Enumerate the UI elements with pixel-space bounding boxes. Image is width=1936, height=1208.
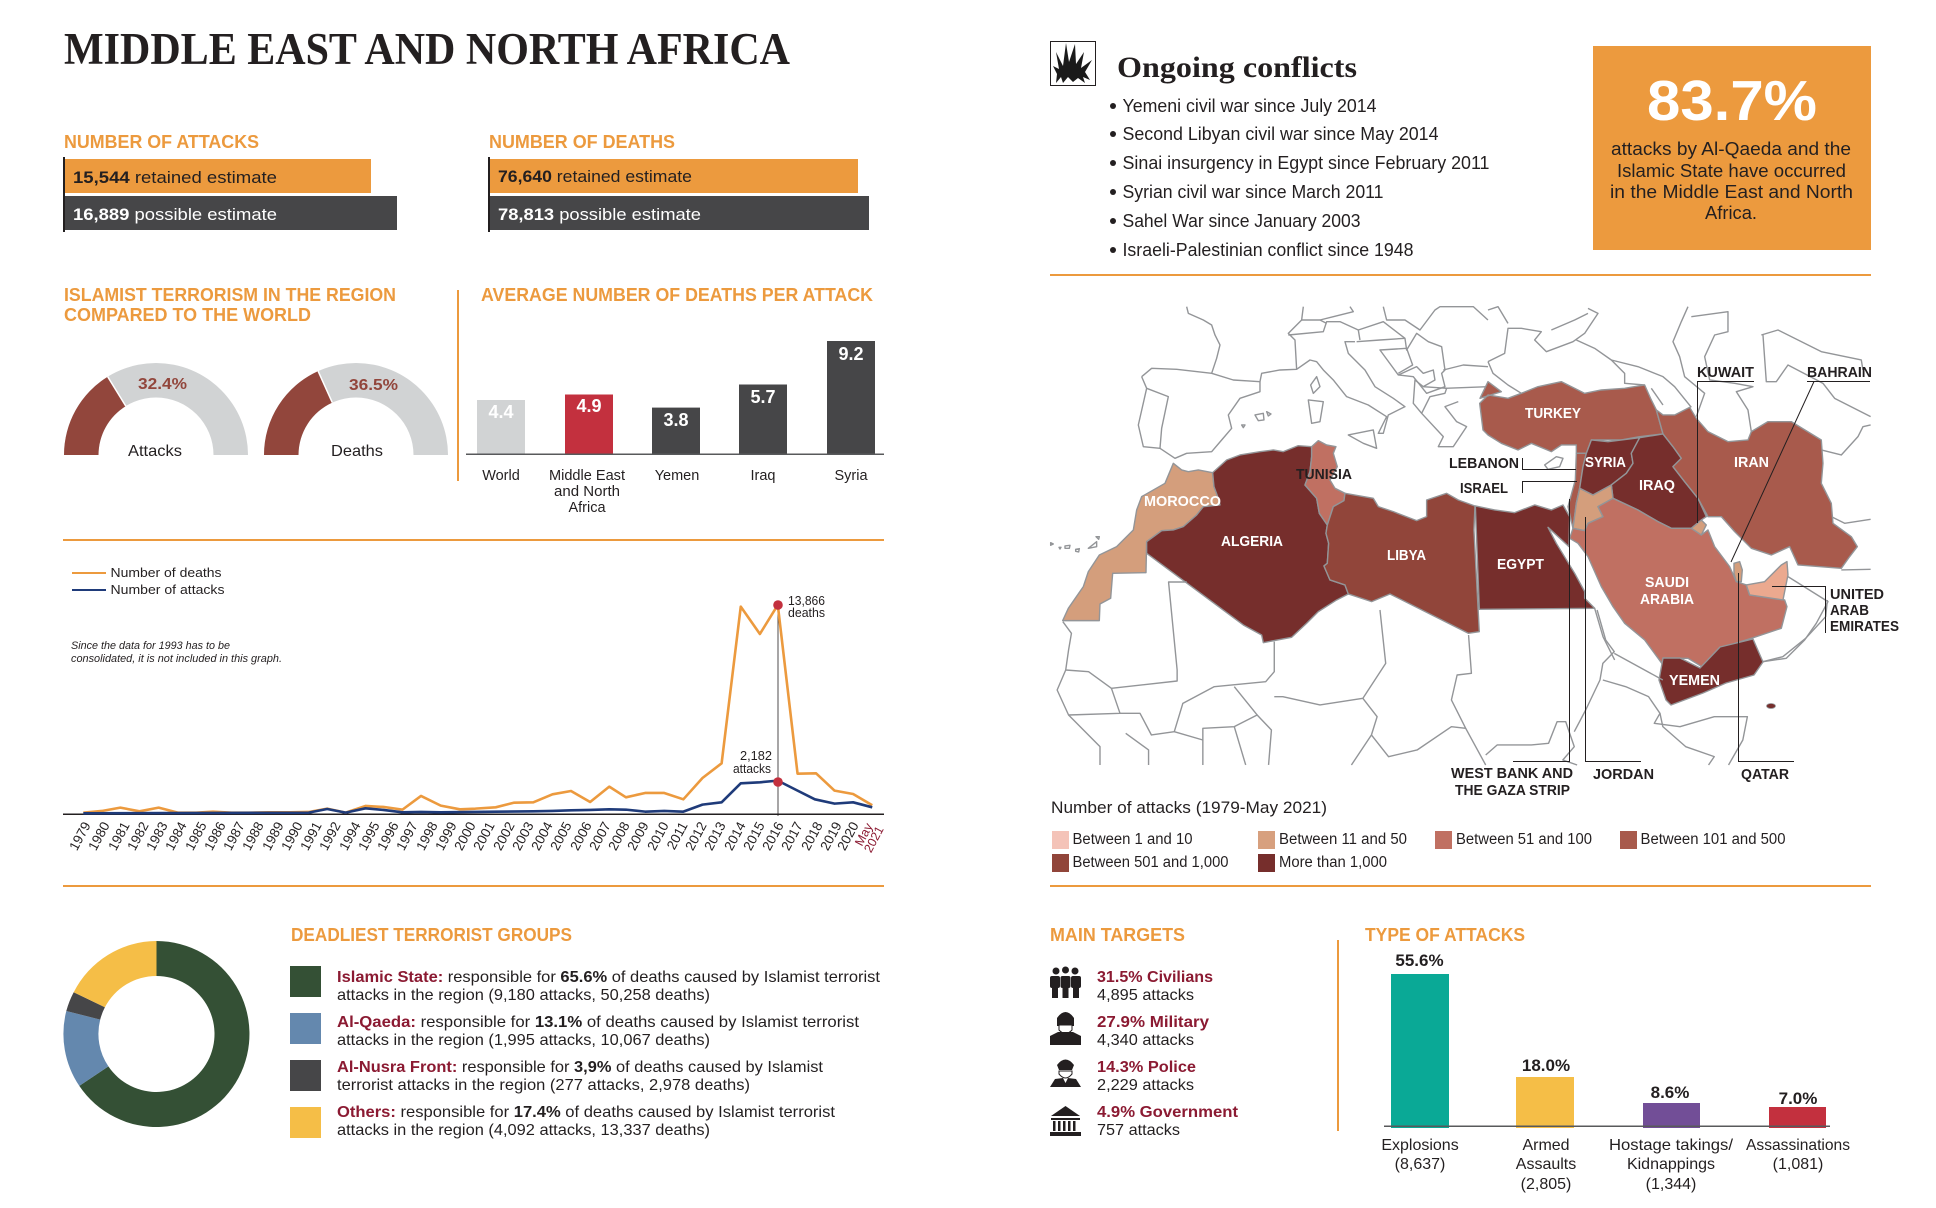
- country: Jordan: [1573, 485, 1613, 531]
- divider: [1050, 274, 1871, 276]
- year axis labels: 1991: [297, 819, 325, 853]
- legend: deadliest terrorist groups: Al-Nusra Front: responsible for 3,9% of deaths caused by Islamist: [337, 1059, 824, 1076]
- map labels on countries: SYRIA: [1585, 454, 1626, 471]
- legend: deadliest terrorist groups: terrorist attacks in the region (277 attacks, 2,978 deaths): [337, 1077, 750, 1094]
- map leader labels: [1449, 364, 1899, 799]
- bar chart: type of attacks: 7.0%: [1779, 1089, 1817, 1108]
- map leader labels: BAHRAIN: [1807, 364, 1872, 381]
- year axis labels: 2021: [861, 824, 887, 855]
- bar chart: average deaths per attack: World: [482, 468, 520, 484]
- title: MIDDLE EAST AND NORTH AFRICA: [64, 24, 790, 74]
- callout: 83.7%: attacks by Al-Qaeda and the: [1611, 139, 1851, 159]
- bar chart: type of attacks: Explosions: [1381, 1137, 1459, 1154]
- legend: deadliest terrorist groups: Others: responsible for 17.4% of deaths caused by Islamist terrorist: [337, 1104, 836, 1121]
- year axis labels: 1984: [162, 819, 190, 853]
- bar chart: type of attacks: TYPE OF ATTACKS: [1365, 925, 1525, 945]
- line chart: deaths and attacks by year: 13,866: [788, 594, 825, 608]
- icon: military: [1050, 1012, 1081, 1045]
- year axis labels: 2008: [605, 819, 633, 853]
- divider: [1337, 940, 1339, 1131]
- year axis labels: 1997: [393, 819, 421, 853]
- divider: [63, 885, 884, 887]
- country: United Arab Emirates: [1746, 562, 1788, 600]
- year axis labels: 1999: [432, 819, 460, 853]
- donut chart: deadliest groups: [63, 941, 249, 1127]
- map leader labels: KUWAIT: [1697, 364, 1754, 381]
- panel: number of attacks: 16,889 possible estimate: [73, 205, 277, 224]
- legend: number of attacks: Between 11 and 50: [1279, 831, 1407, 848]
- panel: main targets: 2,229 attacks: [1097, 1077, 1194, 1094]
- legend: deadliest terrorist groups: attacks in the region (4,092 attacks, 13,337 deaths): [337, 1122, 710, 1139]
- icon: police: [1050, 1060, 1081, 1087]
- map labels on countries: TURKEY: [1525, 405, 1581, 422]
- map leader labels: JORDAN: [1593, 766, 1654, 783]
- country: Morocco: [1063, 463, 1220, 621]
- bar chart: type of attacks: 18.0%: [1522, 1056, 1570, 1075]
- chart note: [71, 640, 282, 665]
- legend: number of attacks: Number of attacks (1979-May 2021): [1051, 798, 1327, 817]
- country: Libya: [1324, 493, 1479, 633]
- heading: ongoing conflicts: Ongoing conflicts: [1117, 51, 1357, 84]
- bar chart: average deaths per attack: 4.4: [488, 402, 514, 422]
- bar chart: type of attacks: (1,081): [1773, 1156, 1823, 1173]
- legend: number of attacks: Between 1 and 10: [1072, 831, 1193, 848]
- bar chart: type of attacks: 55.6%: [1395, 951, 1444, 970]
- year axis labels: 1980: [85, 819, 113, 853]
- year axis labels: 1986: [201, 819, 229, 853]
- map: attacks by country: [1051, 307, 1899, 799]
- panel: main targets: [1050, 925, 1239, 1139]
- legend: deadliest terrorist groups: Islamic State: responsible for 65.6% of deaths caused by Islamist terrorist: [337, 969, 881, 986]
- map labels on countries: EGYPT: [1497, 556, 1544, 573]
- callout: 83.7%: Islamic State have occurred: [1617, 161, 1846, 181]
- year axis labels: 1983: [143, 819, 171, 853]
- panel: islamist terrorism gauges: Deaths: [331, 443, 383, 460]
- panel: number of attacks: [63, 132, 397, 232]
- year axis labels: 2017: [778, 819, 806, 853]
- panel: islamist terrorism gauges: COMPARED TO THE WORLD: [64, 305, 311, 325]
- bar chart: type of attacks: Assaults: [1516, 1156, 1576, 1173]
- list: ongoing conflicts: [1110, 96, 1490, 260]
- map leader labels: ARAB: [1830, 602, 1869, 619]
- country: Qatar: [1734, 562, 1742, 582]
- Socotra: [1766, 704, 1776, 708]
- country: Egypt: [1475, 505, 1595, 609]
- list: ongoing conflicts: Sinai insurgency in Egypt since February 2011: [1122, 153, 1490, 173]
- panel: main targets: 4,340 attacks: [1097, 1032, 1194, 1049]
- year axis labels: 2009: [624, 819, 652, 853]
- bar chart: average deaths per attack: 3.8: [663, 410, 689, 430]
- bar chart: type of attacks: Hostage takings/: [1609, 1137, 1734, 1154]
- panel: islamist terrorism gauges: 36.5%: [349, 377, 398, 394]
- country: Yemen: [1659, 639, 1763, 705]
- panel: main targets: 4.9% Government: [1097, 1104, 1239, 1121]
- bar chart: type of attacks: (8,637): [1395, 1156, 1445, 1173]
- country: Lebanon and Israel: [1568, 453, 1586, 528]
- list: ongoing conflicts: Second Libyan civil war since May 2014: [1122, 124, 1438, 144]
- legend: number of attacks: [1051, 798, 1786, 872]
- year axis labels: 2010: [644, 819, 672, 853]
- year axis labels: 2015: [740, 819, 768, 853]
- year axis labels: 1985: [182, 819, 210, 853]
- panel: number of attacks: NUMBER OF ATTACKS: [64, 132, 259, 152]
- legend: deadliest terrorist groups: DEADLIEST TERRORIST GROUPS: [291, 925, 572, 945]
- bar chart: average deaths per attack: Middle East: [549, 468, 625, 484]
- base map outlines south: [1057, 582, 1827, 765]
- map leader labels: UNITED: [1830, 586, 1884, 603]
- year axis labels: 2020: [834, 819, 862, 853]
- chart legend: Number of deaths: [110, 565, 222, 580]
- year axis labels: 1979: [66, 819, 94, 853]
- icon: government: [1050, 1106, 1081, 1136]
- legend: number of attacks: Between 51 and 100: [1456, 831, 1592, 848]
- panel: number of deaths: 78,813 possible estimate: [498, 205, 701, 224]
- legend: deadliest terrorist groups: attacks in the region (9,180 attacks, 50,258 deaths): [337, 987, 710, 1004]
- year axis labels: 2012: [682, 819, 710, 853]
- map leader labels: WEST BANK AND: [1451, 765, 1573, 782]
- year axis labels: [66, 819, 887, 855]
- line chart: deaths and attacks by year: deaths: [788, 606, 825, 620]
- bar chart: average deaths per attack: Syria: [834, 468, 868, 484]
- chart legend: Number of attacks: [110, 582, 225, 597]
- country: Algeria: [1147, 446, 1348, 643]
- year axis labels: 1989: [259, 819, 287, 853]
- panel: number of attacks: 15,544 retained estimate: [73, 168, 277, 187]
- bar chart: average deaths per attack: Iraq: [750, 468, 776, 484]
- base map outlines west: [1051, 307, 1488, 552]
- list: ongoing conflicts: Syrian civil war since March 2011: [1122, 182, 1384, 202]
- country: Iraq: [1611, 434, 1706, 528]
- panel: islamist terrorism gauges: [64, 285, 448, 460]
- year axis labels: 2000: [451, 819, 479, 853]
- map labels on countries: YEMEN: [1669, 672, 1720, 689]
- map labels on countries: [1144, 405, 1769, 689]
- map labels on countries: ALGERIA: [1221, 533, 1283, 550]
- line chart: deaths and attacks by year: 2,182: [740, 749, 772, 763]
- panel: number of deaths: NUMBER OF DEATHS: [489, 132, 675, 152]
- map leader labels: ISRAEL: [1460, 480, 1508, 497]
- divider: [63, 539, 884, 541]
- chart legend: [72, 565, 225, 597]
- year axis labels: 2016: [759, 819, 787, 853]
- list: ongoing conflicts: Yemeni civil war since July 2014: [1122, 96, 1376, 116]
- bar chart: type of attacks: Kidnappings: [1627, 1156, 1715, 1173]
- map labels on countries: SAUDI: [1645, 574, 1689, 591]
- panel: main targets: 14.3% Police: [1097, 1059, 1196, 1076]
- year axis labels: 2007: [586, 819, 614, 853]
- legend: deadliest terrorist groups: Al-Qaeda: responsible for 13.1% of deaths caused by Islamist terrorist: [337, 1014, 860, 1031]
- country: Syria: [1580, 438, 1640, 495]
- year axis labels: 2013: [701, 819, 729, 853]
- year axis labels: 1990: [278, 819, 306, 853]
- callout: 83.7%: [1593, 46, 1871, 250]
- chart note: Since the data for 1993 has to be: [71, 640, 230, 652]
- year axis labels: 2002: [490, 819, 518, 853]
- map labels on countries: LIBYA: [1387, 547, 1426, 564]
- map leader labels: THE GAZA STRIP: [1455, 782, 1570, 799]
- year axis labels: 2005: [547, 819, 575, 853]
- divider: [1050, 885, 1871, 887]
- year axis labels: 1998: [413, 819, 441, 853]
- chart note: consolidated, it is not included in this graph.: [71, 653, 282, 665]
- year axis labels: 2019: [817, 819, 845, 853]
- legend: number of attacks: More than 1,000: [1279, 854, 1387, 871]
- map labels on countries: TUNISIA: [1296, 466, 1352, 483]
- year axis labels: 2004: [528, 819, 556, 853]
- bar chart: average deaths per attack: AVERAGE NUMBER OF DEATHS PER ATTACK: [481, 285, 873, 305]
- list: ongoing conflicts: Sahel War since January 2003: [1122, 211, 1360, 231]
- bar chart: average deaths per attack: 9.2: [838, 344, 864, 364]
- line chart: deaths and attacks by year: attacks: [733, 762, 771, 776]
- line chart: deaths and attacks by year: [63, 565, 887, 855]
- callout: 83.7%: Africa.: [1705, 203, 1757, 223]
- map leader labels: EMIRATES: [1830, 618, 1899, 635]
- panel: islamist terrorism gauges: Attacks: [128, 443, 182, 460]
- panel: islamist terrorism gauges: 32.4%: [138, 376, 187, 393]
- panel: main targets: 4,895 attacks: [1097, 987, 1194, 1004]
- base map outlines east: [1488, 307, 1871, 662]
- bar chart: average deaths per attack: Africa: [568, 500, 606, 516]
- icon: explosion: [1050, 42, 1096, 86]
- panel: number of deaths: [488, 132, 869, 232]
- divider: [457, 290, 459, 481]
- panel: islamist terrorism gauges: ISLAMIST TERRORISM IN THE REGION: [64, 285, 396, 305]
- map labels on countries: IRAN: [1734, 454, 1769, 471]
- year axis labels: 2014: [721, 819, 749, 853]
- bar chart: type of attacks: Armed: [1522, 1137, 1570, 1154]
- legend: number of attacks: Between 501 and 1,000: [1072, 854, 1229, 871]
- list: ongoing conflicts: Israeli-Palestinian conflict since 1948: [1122, 240, 1414, 260]
- year axis labels: 2018: [798, 819, 826, 853]
- year axis labels: 1982: [124, 819, 152, 853]
- map labels on countries: IRAQ: [1639, 477, 1675, 494]
- legend: number of attacks: Between 101 and 500: [1640, 831, 1786, 848]
- year axis labels: 2011: [664, 819, 691, 852]
- panel: main targets: 757 attacks: [1097, 1122, 1180, 1139]
- panel: number of deaths: 76,640 retained estimate: [498, 167, 692, 186]
- country: Tunisia: [1305, 441, 1345, 525]
- map labels on countries: ARABIA: [1640, 591, 1694, 608]
- bar chart: average deaths per attack: 4.9: [576, 396, 602, 416]
- legend: deadliest terrorist groups: [290, 925, 881, 1139]
- bar chart: average deaths per attack: 5.7: [750, 387, 776, 407]
- year axis labels: 1994: [336, 819, 364, 853]
- callout: 83.7%: 83.7%: [1647, 69, 1817, 133]
- bar chart: type of attacks: Assassinations: [1746, 1137, 1850, 1154]
- year axis labels: 1988: [239, 819, 267, 853]
- country: Iran: [1656, 407, 1857, 568]
- map leader labels: QATAR: [1741, 766, 1789, 783]
- bar chart: type of attacks: (1,344): [1646, 1176, 1696, 1193]
- legend: deadliest terrorist groups: attacks in the region (1,995 attacks, 10,067 deaths): [337, 1032, 710, 1049]
- bar chart: average deaths per attack: Yemen: [655, 468, 699, 484]
- year axis labels: 2001: [470, 819, 498, 853]
- icon: civilians: [1050, 966, 1081, 998]
- bar chart: type of attacks: 8.6%: [1651, 1083, 1689, 1102]
- country: Saudi Arabia: [1570, 498, 1787, 668]
- country: Turkey: [1480, 382, 1663, 453]
- year axis labels: May: [852, 820, 876, 848]
- callout: 83.7%: in the Middle East and North: [1610, 182, 1853, 202]
- panel: main targets: 31.5% Civilians: [1097, 969, 1213, 986]
- year axis labels: 1981: [105, 819, 133, 853]
- map labels on countries: MOROCCO: [1144, 493, 1221, 510]
- year axis labels: 1996: [374, 819, 402, 853]
- year axis labels: 2006: [567, 819, 595, 853]
- map leader labels: LEBANON: [1449, 455, 1519, 472]
- bar chart: average deaths per attack: and North: [554, 484, 620, 500]
- bar chart: type of attacks: (2,805): [1521, 1176, 1571, 1193]
- bar chart: average deaths per attack: [466, 285, 884, 516]
- panel: main targets: 27.9% Military: [1097, 1014, 1209, 1031]
- year axis labels: 1987: [220, 819, 248, 853]
- country: Kuwait: [1691, 520, 1706, 535]
- year axis labels: 1992: [316, 819, 344, 853]
- year axis labels: 1995: [355, 819, 383, 853]
- bar chart: type of attacks: [1365, 925, 1850, 1193]
- panel: main targets: MAIN TARGETS: [1050, 925, 1185, 945]
- year axis labels: 2003: [509, 819, 537, 853]
